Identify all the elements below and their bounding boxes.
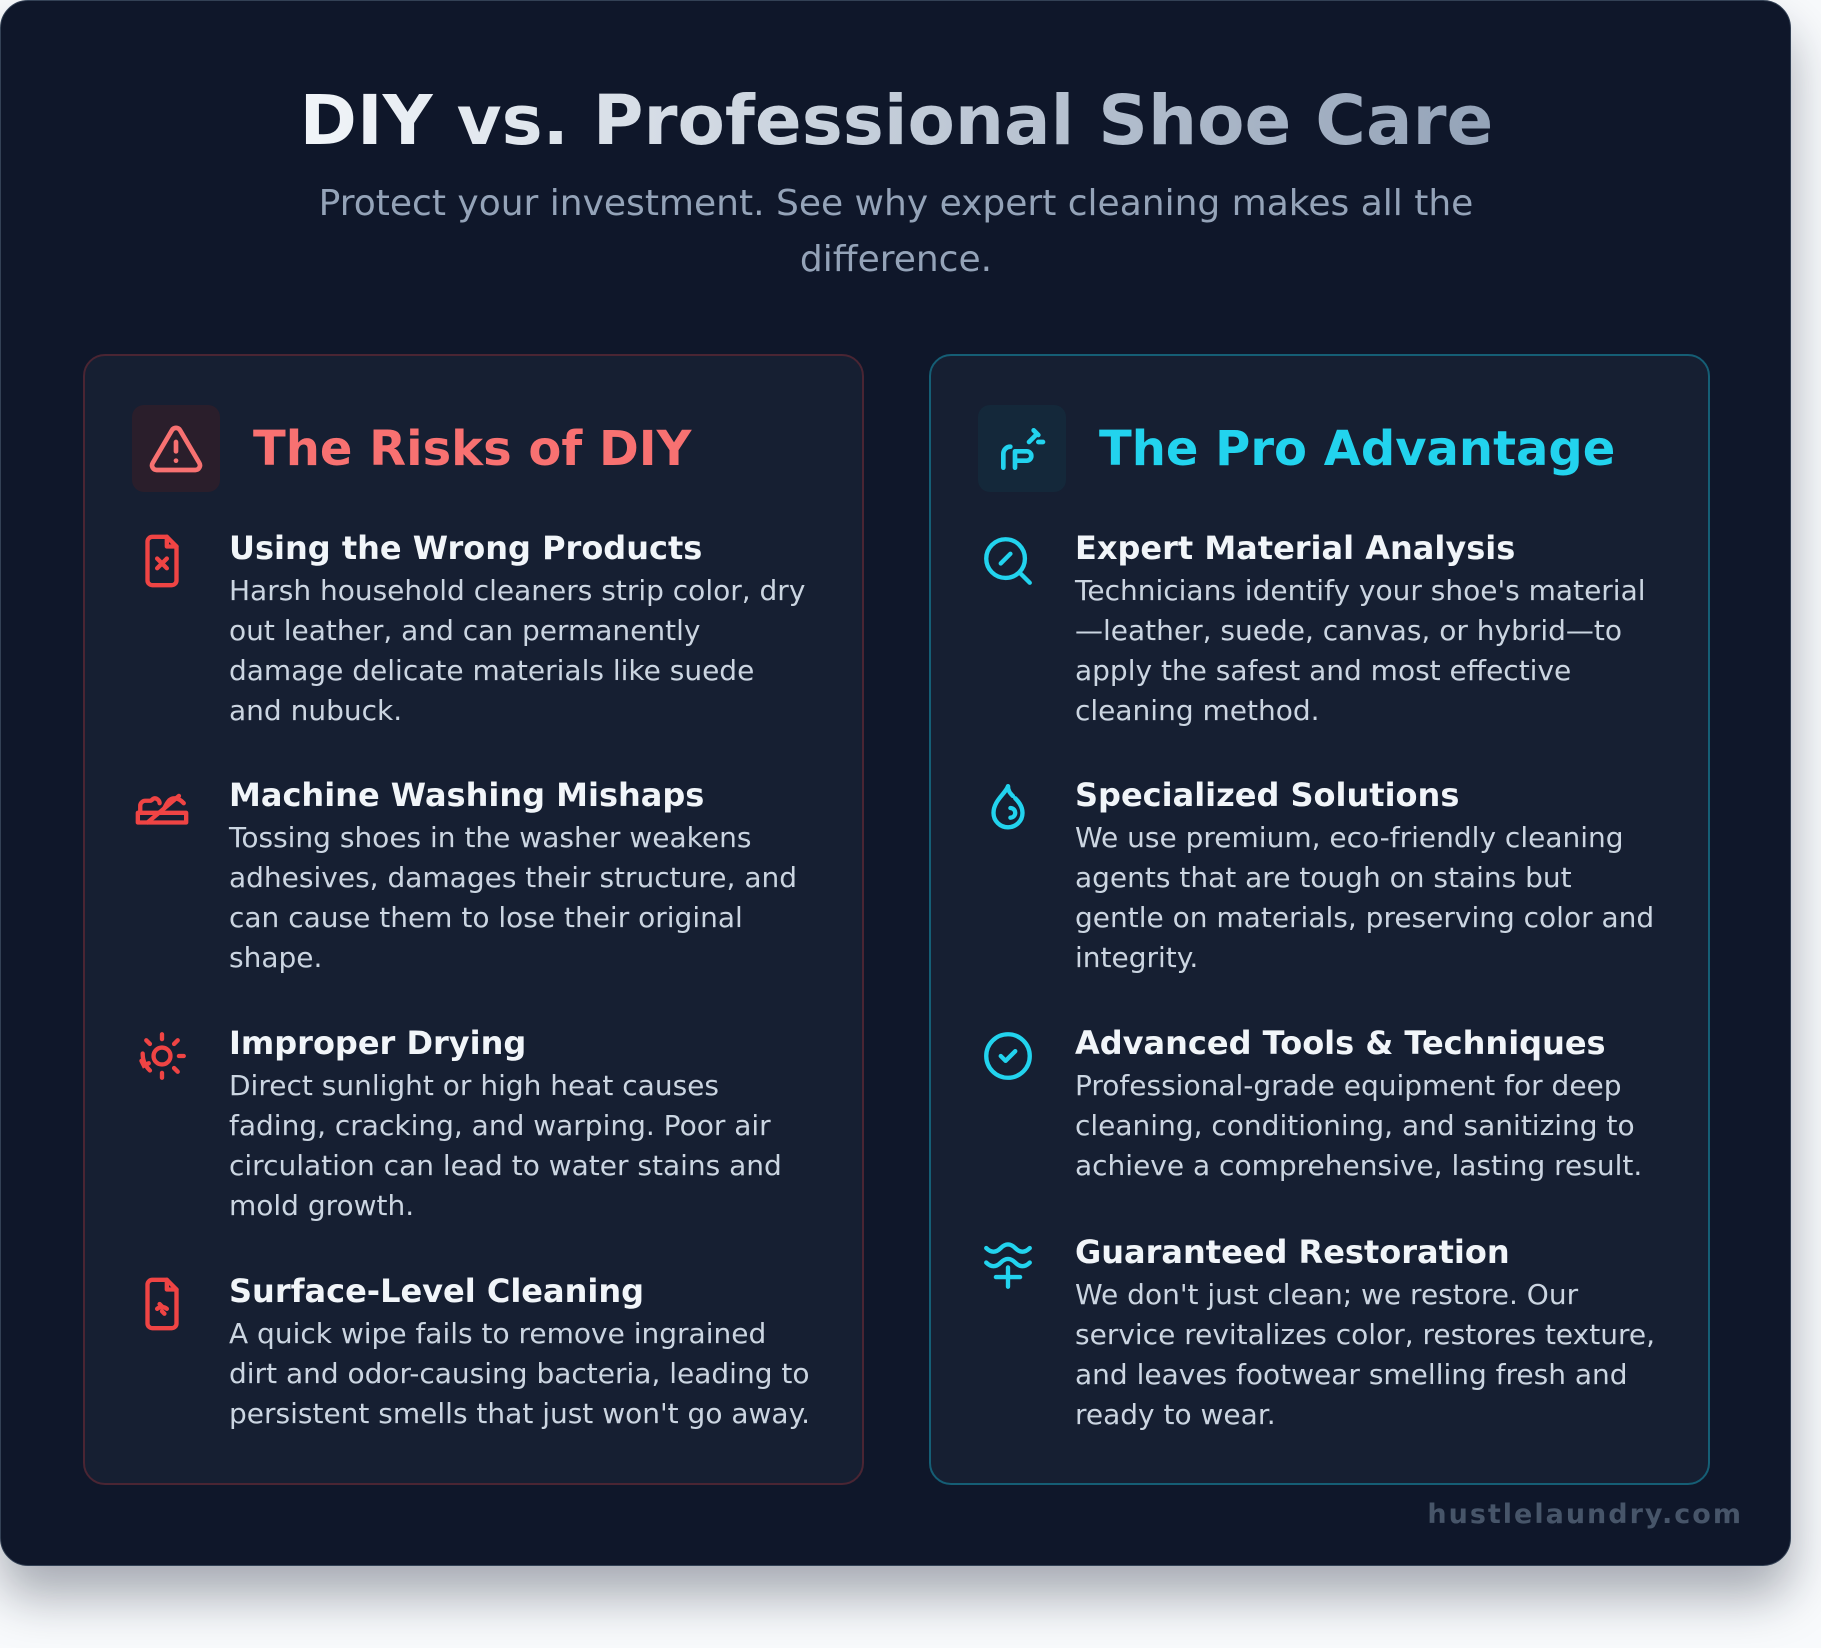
icon: file bug	[145, 1278, 179, 1330]
item: surface cleaning: A quick wipe fails to remove ingrained dirt and odor-causing bacteria, leading to persistent smells that just won't go away.	[229, 1317, 810, 1430]
heading: The Pro Advantage	[1099, 421, 1615, 477]
item: advanced tools: Advanced Tools & Techniques	[1075, 1024, 1606, 1062]
icon: spray	[978, 405, 1066, 492]
item: specialized solutions: Specialized Solutions	[1075, 776, 1459, 814]
item: wrong products: Using the Wrong Products	[229, 529, 702, 567]
item: surface cleaning	[145, 1272, 810, 1430]
icon: warning	[132, 405, 220, 492]
item: improper drying	[139, 1024, 782, 1222]
icon: magnifier	[984, 537, 1032, 585]
title: DIY vs. Professional Shoe Care	[300, 81, 1493, 161]
item: material analysis: Technicians identify your shoe's material —leather, suede, canvas, or hybrid—to apply the safest and most effective cleaning method.	[1075, 574, 1646, 727]
heading: The Risks of DIY	[253, 421, 691, 477]
item: material analysis	[984, 529, 1646, 727]
item: machine washing: Machine Washing Mishaps	[229, 776, 704, 814]
subtitle: Protect your investment. See why expert cleaning makes all the difference.	[319, 183, 1473, 280]
item: machine washing	[136, 776, 797, 974]
item: improper drying: Improper Drying	[229, 1024, 526, 1062]
item: specialized solutions	[991, 776, 1654, 974]
icon: drop	[991, 784, 1025, 830]
item: guaranteed restoration	[984, 1233, 1655, 1431]
icon: sun	[139, 1032, 186, 1080]
item: machine washing: Tossing shoes in the washer weakens adhesives, damages their structure, and can cause them to lose their original shape.	[229, 821, 797, 974]
item: guaranteed restoration: We don't just clean; we restore. Our service revitalizes color, restores texture, and leaves footwear smelling fresh and ready to wear.	[1075, 1278, 1655, 1431]
item: advanced tools	[984, 1024, 1642, 1182]
item: surface cleaning: Surface-Level Cleaning	[229, 1272, 644, 1310]
item: advanced tools: Professional-grade equipment for deep cleaning, conditioning, and sanitizing to achieve a comprehensive, lasting result.	[1075, 1069, 1642, 1182]
item: wrong products: Harsh household cleaners strip color, dry out leather, and can permanently damage delicate materials like suede and nubuck.	[229, 574, 805, 727]
footer brand: hustlelaundry.com	[1427, 1499, 1743, 1530]
item: guaranteed restoration: Guaranteed Restoration	[1075, 1233, 1510, 1271]
icon: washer	[136, 794, 188, 825]
panel: risks of DIY	[83, 354, 864, 1485]
panel: pro advantage	[929, 354, 1710, 1485]
icon: waves	[984, 1242, 1032, 1289]
item: specialized solutions: We use premium, eco-friendly cleaning agents that are tough on stains but gentle on materials, preserving color and integrity.	[1075, 821, 1654, 974]
item: wrong products	[145, 529, 805, 727]
icon: check circle	[984, 1032, 1032, 1080]
icon: file x	[145, 534, 179, 588]
item: improper drying: Direct sunlight or high heat causes fading, cracking, and warping. Poor air circulation can lead to water stains and mold growth.	[229, 1069, 782, 1222]
item: material analysis: Expert Material Analysis	[1075, 529, 1515, 567]
